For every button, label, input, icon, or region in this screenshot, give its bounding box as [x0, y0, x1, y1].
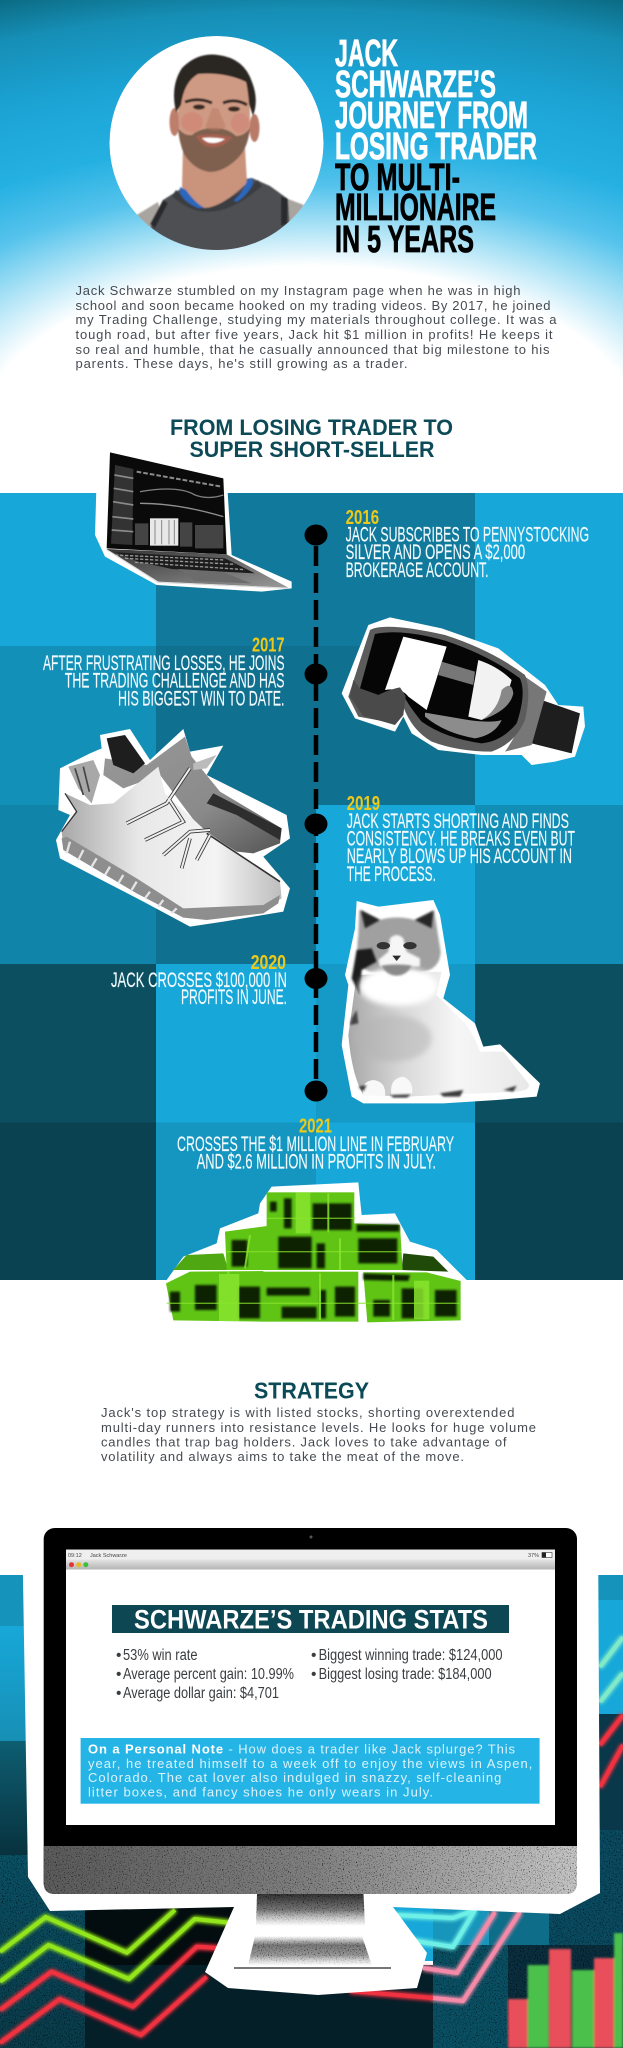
panel: chart background [0, 1575, 623, 2048]
mouth [196, 134, 232, 147]
stats left column: Average dollar gain: $4,701 [123, 1685, 279, 1702]
title: SCHWARZE’S [335, 64, 496, 106]
blue collar [180, 178, 253, 208]
milestone 2016 [346, 507, 589, 582]
browser bar: 09:12 [68, 1553, 82, 1559]
section heading: timeline: FROM LOSING TRADER TO [170, 415, 453, 440]
stats left column: 53% win rate [123, 1647, 198, 1664]
panel: timeline background grid [0, 493, 623, 1280]
monitor body [44, 1528, 577, 1894]
milestone 2020: PROFITS IN JUNE. [181, 985, 287, 1009]
stats right column: Biggest winning trade: $124,000 [319, 1647, 503, 1664]
neck [182, 148, 247, 208]
stats right column: Biggest losing trade: $184,000 [319, 1666, 492, 1683]
straps [150, 196, 288, 228]
front shoe upper [62, 767, 282, 920]
title [335, 33, 537, 261]
collar ring [172, 180, 262, 212]
intro paragraph: tough road, but after five years, Jack hit $1 million in profits! He keeps it [76, 327, 553, 342]
candlesticks [508, 1933, 623, 2048]
milestone 2020 [111, 952, 287, 1009]
title: TO MULTI- [335, 157, 460, 199]
laces [127, 768, 210, 868]
eyebrows [185, 100, 247, 105]
browser bar: Jack Schwarze [90, 1553, 127, 1559]
icon: sneakers [56, 729, 290, 927]
milestone 2017: AFTER FRUSTRATING LOSSES, HE JOINS [43, 651, 284, 675]
browser bar: 37% [528, 1553, 539, 1559]
stats left column: • [116, 1647, 121, 1664]
section heading: timeline: SUPER SHORT-SELLER [190, 437, 434, 462]
stats left column [116, 1647, 294, 1702]
ears [170, 108, 180, 136]
milestone 2017: 2017 [252, 635, 284, 657]
strategy paragraph: volatility and always aims to take the meat of the move. [101, 1449, 464, 1464]
milestone 2017: THE TRADING CHALLENGE AND HAS [65, 669, 284, 693]
milestone 2016: 2016 [346, 507, 379, 529]
milestone 2017 [43, 635, 284, 711]
milestone 2019: 2019 [347, 793, 380, 815]
strategy paragraph: Jack's top strategy is with listed stocks, shorting overextended [101, 1405, 514, 1420]
stubble [178, 128, 250, 172]
intro paragraph: so real and humble, that he casually announced that big milestone to his [76, 342, 550, 357]
timeline dots [304, 524, 328, 1102]
nose [205, 108, 226, 130]
timeline dashed line [314, 546, 318, 1085]
milestone 2020: JACK CROSSES $100,000 IN [111, 968, 287, 992]
header background [0, 0, 623, 494]
section heading: timeline [170, 415, 453, 462]
intro paragraph: Jack Schwarze stumbled on my Instagram page when he was in high [76, 283, 520, 298]
section heading: strategy: STRATEGY [254, 1378, 369, 1404]
milestone 2021: 2021 [299, 1116, 332, 1138]
strategy paragraph: multi-day runners into resistance levels. He looks for huge volume [101, 1420, 536, 1435]
icon: laptop [95, 450, 292, 592]
stats right column: • [311, 1666, 316, 1683]
browser bar [66, 1550, 555, 1570]
screen [66, 1550, 555, 1825]
sole [62, 837, 280, 920]
face [177, 72, 252, 137]
title: IN 5 YEARS [335, 219, 474, 261]
monitor chin [44, 1846, 577, 1894]
portrait photo [110, 36, 324, 260]
title: JACK [335, 33, 398, 75]
camera [310, 1536, 312, 1538]
monitor stand [256, 1894, 365, 1926]
milestone 2020: 2020 [251, 952, 286, 974]
cheeks [181, 112, 203, 132]
milestone 2017: HIS BIGGEST WIN TO DATE. [118, 687, 284, 711]
personal note callout: Colorado. The cat lover also indulged in snazzy, self-cleaning [88, 1770, 501, 1785]
stats right column: • [311, 1647, 316, 1664]
title: MILLIONAIRE [335, 187, 496, 229]
front shoe collar [68, 760, 100, 803]
stats left column: Average percent gain: 10.99% [123, 1666, 294, 1683]
intro paragraph [76, 283, 557, 371]
milestone 2016: BROKERAGE ACCOUNT. [346, 558, 489, 582]
eyes [193, 104, 205, 110]
chart lines [0, 1637, 623, 2043]
monitor foot [248, 1936, 372, 1966]
milestone 2021 [177, 1116, 454, 1174]
monitor cut-out halo [22, 1520, 600, 1995]
milestone 2021: AND $2.6 MILLION IN PROFITS IN JULY. [197, 1150, 436, 1174]
gray shoulders [136, 198, 304, 228]
milestone 2019: THE PROCESS. [347, 862, 436, 886]
back shoe [103, 737, 282, 853]
personal note callout [81, 1738, 540, 1804]
personal note callout: On a Personal Note - How does a trader like Jack splurge? This [88, 1741, 516, 1756]
stats left column: • [116, 1685, 121, 1702]
personal note callout: litter boxes, and fancy shoes he only wears in July. [88, 1785, 433, 1800]
monitor [44, 1528, 577, 1969]
intro paragraph: parents. These days, he's still growing as a trader. [76, 356, 408, 371]
personal note callout: year, he treated himself to a week off to enjoy the views in Aspen, [88, 1756, 532, 1771]
stats left column: • [116, 1666, 121, 1683]
icon: cat [342, 900, 540, 1103]
intro paragraph: my Trading Challenge, studying my materials throughout college. It was a [76, 312, 557, 327]
icon: goggles [342, 617, 585, 765]
shirt [150, 177, 290, 250]
stats heading bar: SCHWARZE’S TRADING STATS [134, 1605, 488, 1635]
intro paragraph: school and soon became hooked on my trading videos. By 2017, he joined [76, 298, 550, 313]
hair [174, 55, 256, 116]
milestone 2019 [347, 793, 575, 886]
strategy paragraph: candles that trap bag holders. Jack loves to take advantage of [101, 1434, 507, 1449]
stats right column [311, 1647, 503, 1683]
strategy paragraph [101, 1405, 536, 1464]
icon: money stacks [166, 1182, 468, 1322]
